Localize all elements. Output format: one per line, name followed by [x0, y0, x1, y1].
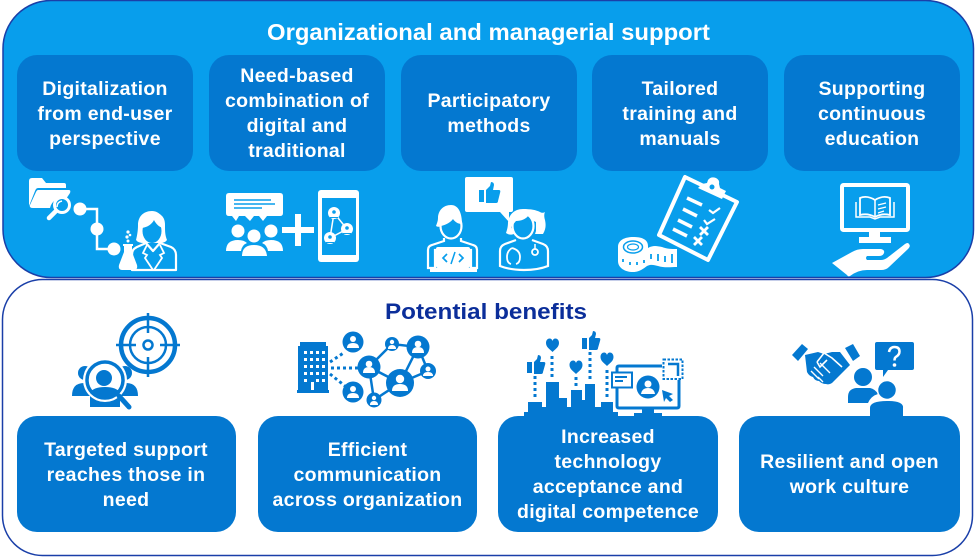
card: need-based combination: traditional	[248, 140, 346, 162]
card: need-based combination: Need-based	[240, 65, 354, 87]
card: need-based combination	[209, 55, 385, 171]
card: supporting continuous education	[784, 55, 960, 171]
card: participatory methods	[401, 55, 577, 171]
heading: organizational and managerial support: Organizational and managerial support	[267, 19, 710, 45]
card: technology acceptance: digital competence	[517, 501, 699, 523]
card: resilient work culture: Resilient and open	[760, 451, 939, 473]
card: targeted support: Targeted support	[44, 439, 208, 461]
icon: clipboard checklist and measuring tape	[618, 177, 737, 272]
card: tailored training and manuals: manuals	[639, 128, 721, 150]
card: targeted support: reaches those in	[47, 464, 205, 486]
card: efficient communication: across organization	[273, 489, 462, 511]
card: efficient communication	[258, 416, 477, 532]
card: digitalization from end-user perspective: perspective	[49, 128, 161, 150]
card: participatory methods: methods	[447, 115, 531, 137]
heading: potential benefits: Potential benefits	[385, 299, 587, 324]
icon: handshake and people with question bubble	[792, 342, 914, 416]
icon: organization building and people network	[297, 332, 436, 408]
card: resilient work culture: work culture	[789, 476, 909, 498]
card: technology acceptance	[498, 416, 718, 532]
card: technology acceptance: acceptance and	[533, 476, 683, 498]
card: efficient communication: communication	[294, 464, 442, 486]
icon: developer and clinician with thumbs-up bubble	[428, 177, 548, 272]
icon: monitor with book on hand	[832, 185, 910, 276]
card: targeted support: need	[103, 489, 149, 511]
card: tailored training and manuals: Tailored	[642, 78, 718, 100]
icon: folder search path to scientist	[29, 178, 176, 270]
card: supporting continuous education: education	[825, 128, 919, 150]
card: supporting continuous education: continuous	[818, 103, 926, 125]
panel: organizational and managerial support	[3, 0, 974, 278]
icon: group discussion plus phone network	[226, 190, 359, 262]
card: technology acceptance: Increased	[561, 426, 655, 448]
card: tailored training and manuals	[592, 55, 768, 171]
card: targeted support	[17, 416, 236, 532]
card: digitalization from end-user perspective: Digitalization	[42, 78, 168, 100]
icon: target and searched people	[72, 313, 180, 407]
card: digitalization from end-user perspective	[17, 55, 193, 171]
panel: potential benefits	[2, 280, 972, 556]
icon: city of likes and monitor	[524, 331, 682, 421]
card: participatory methods: Participatory	[427, 90, 551, 112]
card: need-based combination: combination of	[225, 90, 369, 112]
card: digitalization from end-user perspective: from end-user	[37, 103, 173, 125]
card: technology acceptance: technology	[554, 451, 662, 473]
card: efficient communication: Efficient	[328, 439, 408, 461]
card: supporting continuous education: Supporting	[819, 78, 925, 100]
card: need-based combination: digital and	[247, 115, 347, 137]
card: resilient work culture	[739, 416, 960, 532]
card: tailored training and manuals: training and	[622, 103, 738, 125]
